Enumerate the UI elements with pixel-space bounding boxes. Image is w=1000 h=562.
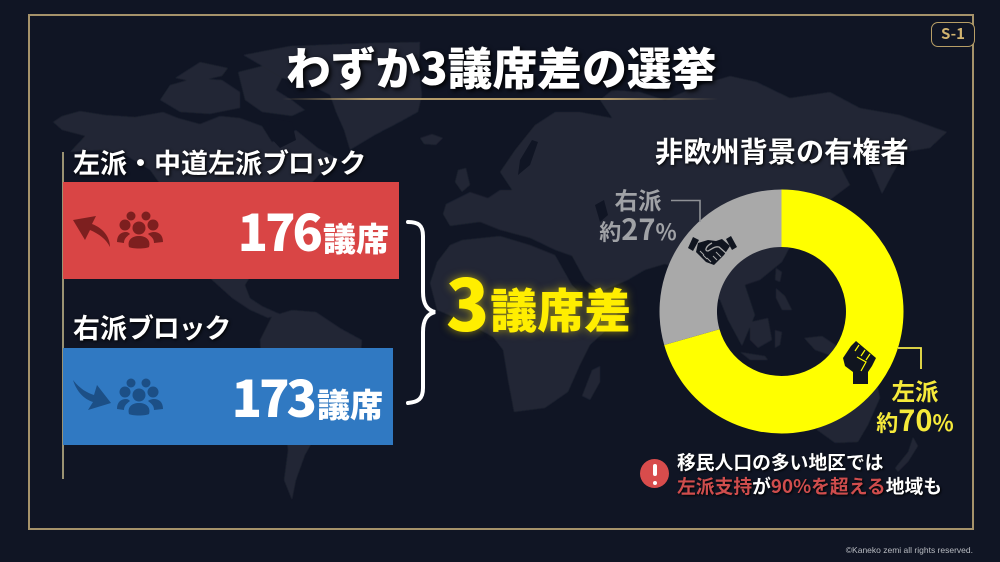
title underline	[282, 98, 718, 100]
leader: left	[898, 348, 921, 369]
heading: donut chart: 非欧州背景の有権者	[655, 130, 909, 171]
icon mark	[653, 464, 656, 476]
value: 176 seats: 176議席	[238, 194, 389, 266]
inland seas	[268, 118, 608, 222]
note text: 移民人口の多い地区では	[677, 448, 884, 475]
segment: left 70%	[664, 190, 904, 433]
label: right 27%: 約27%	[599, 207, 677, 249]
label: right 27%	[599, 182, 677, 249]
leader: right	[671, 200, 700, 222]
panel: right bloc bar	[63, 348, 393, 445]
icon: arrow down-right	[73, 380, 111, 410]
label: left 70%: 左派	[892, 373, 938, 407]
label: right bloc: 右派ブロック	[73, 307, 230, 346]
icon: handshake	[688, 236, 737, 265]
panel: left bloc bar	[63, 182, 399, 279]
badge: S-1	[931, 22, 975, 47]
badge: S-1: S-1	[941, 23, 965, 44]
left axis line	[62, 152, 64, 479]
icon: raised fist	[843, 341, 876, 384]
icon: arrow up-left	[73, 216, 110, 247]
label: right 27%: 右派	[614, 182, 662, 216]
segment: right 27%	[660, 190, 782, 345]
label: left 70%: 約70%	[876, 398, 954, 440]
icon: people group	[117, 378, 163, 416]
copyright: ©Kaneko zemi all rights reserved.	[846, 545, 973, 555]
title: わずか3議席差の選挙	[286, 33, 716, 98]
note text	[677, 448, 942, 499]
note text: 左派支持が90%を超える地域も	[677, 472, 942, 499]
icon: warning	[640, 459, 669, 488]
label: left bloc: 左派・中道左派ブロック	[73, 142, 365, 181]
warning dot	[653, 481, 657, 485]
callout: 3 seat difference: 3議席差	[446, 250, 631, 352]
label: left 70%	[876, 373, 954, 440]
value: 173 seats: 173議席	[232, 360, 383, 432]
icon: people group	[117, 212, 163, 248]
